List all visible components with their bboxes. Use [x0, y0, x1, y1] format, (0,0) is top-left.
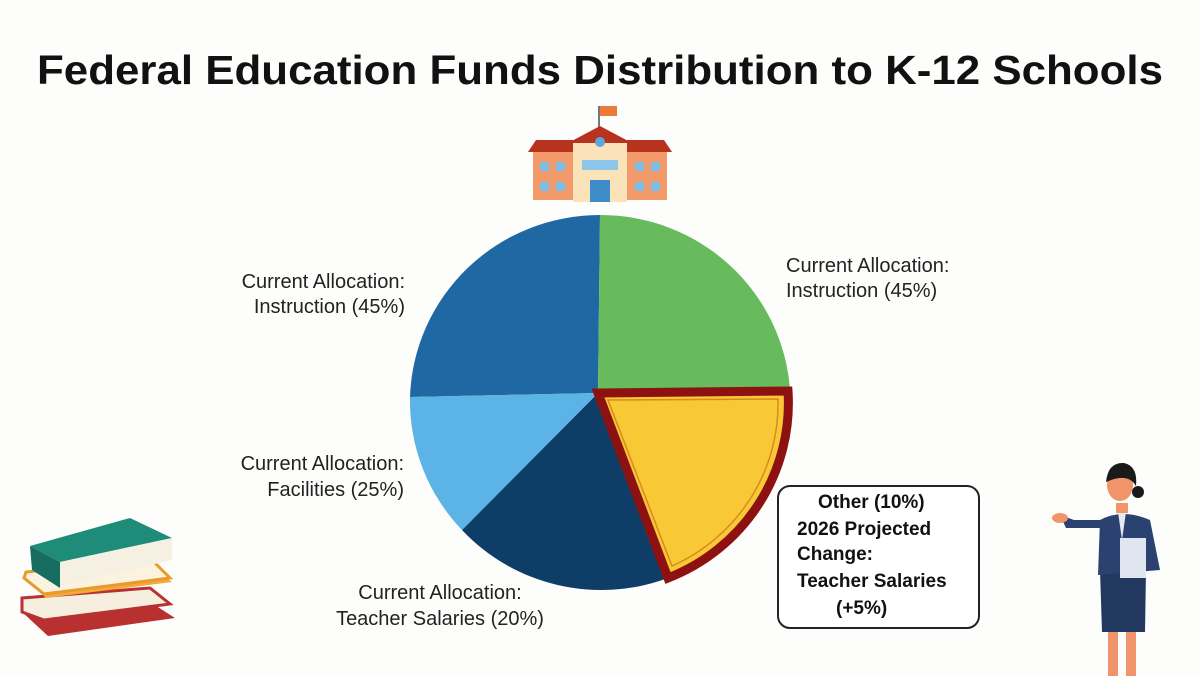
icon: stack of books: [22, 518, 175, 636]
label: teacher salaries: [336, 582, 544, 630]
slice: blue instruction: [410, 215, 600, 397]
slice: light blue facilities: [410, 393, 598, 530]
callout: other / projected change: (+5%): [836, 598, 887, 619]
callout: other / projected change: 2026 Projected: [797, 519, 931, 540]
label: instruction left: Current Allocation:: [242, 271, 405, 293]
label: facilities: [241, 453, 404, 501]
slice: green instruction: [598, 215, 790, 393]
slice: yellow other: [598, 391, 788, 578]
icon: teacher woman: [1052, 463, 1160, 676]
label: teacher salaries: Teacher Salaries (20%): [336, 608, 544, 630]
label: facilities: Facilities (25%): [267, 479, 404, 501]
label: facilities: Current Allocation:: [241, 453, 404, 475]
title: Federal Education Funds Distribution to K-12 Schools: [37, 47, 1163, 93]
label: instruction right: Instruction (45%): [786, 280, 937, 302]
pie chart: [410, 215, 790, 590]
slice: navy teacher salaries: [462, 393, 668, 590]
callout: other / projected change: Teacher Salaries: [797, 571, 947, 592]
label: instruction right: Current Allocation:: [786, 255, 949, 277]
callout: other / projected change: Change:: [797, 544, 873, 565]
label: instruction right: [786, 255, 949, 302]
label: instruction left: Instruction (45%): [254, 296, 405, 318]
callout: other / projected change: Other (10%): [818, 492, 925, 513]
icon: school building: [528, 106, 672, 202]
label: instruction left: [242, 271, 405, 318]
callout: other / projected change: [778, 486, 979, 628]
label: teacher salaries: Current Allocation:: [358, 582, 522, 604]
